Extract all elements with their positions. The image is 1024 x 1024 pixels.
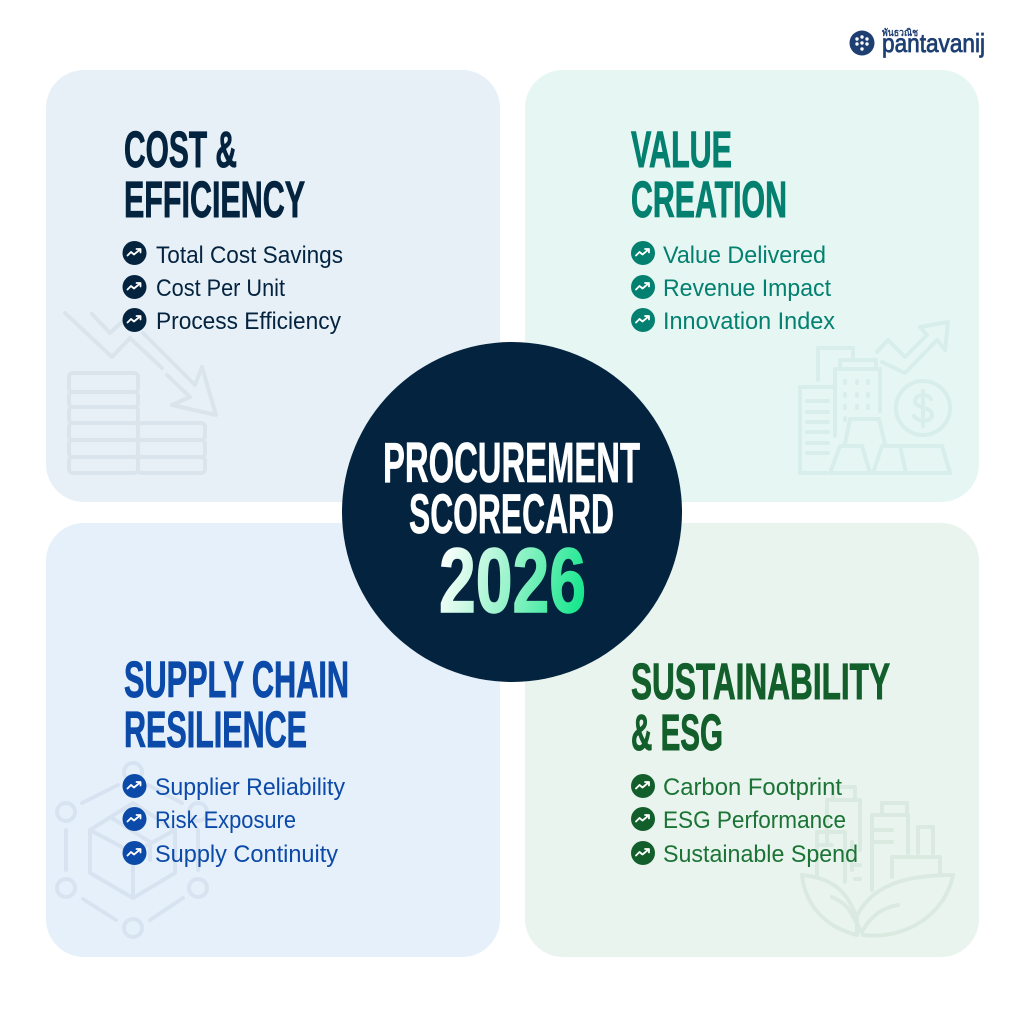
panel: supply chain resilience xyxy=(46,523,500,957)
list: supply metrics: Risk Exposure xyxy=(155,807,296,834)
heading: cost and efficiency: COST & xyxy=(124,121,237,178)
icon: buildings, gold bars and rising arrow xyxy=(800,322,950,473)
list: value metrics: Value Delivered xyxy=(663,242,826,269)
heading: sustainability and ESG xyxy=(631,653,890,761)
logo: pantavanij xyxy=(850,27,985,58)
list: cost metrics: Cost Per Unit xyxy=(156,275,285,302)
heading: sustainability and ESG: & ESG xyxy=(631,704,723,761)
list: supply metrics xyxy=(122,774,345,868)
icon: box in network xyxy=(57,763,207,937)
center circle: procurement scorecard 2026: 2026 xyxy=(439,530,586,632)
icon: falling arrow over stacked coins xyxy=(65,313,216,473)
heading: cost and efficiency: EFFICIENCY xyxy=(124,171,305,228)
list: cost metrics: Process Efficiency xyxy=(156,308,341,335)
list: cost metrics xyxy=(122,241,343,335)
logo: pantavanij: พันธวณิช xyxy=(882,27,918,39)
panel: sustainability and ESG xyxy=(525,523,979,957)
logo: pantavanij: pantavanij xyxy=(882,28,985,58)
heading: value creation xyxy=(631,121,787,228)
heading: value creation: VALUE xyxy=(631,121,732,178)
center circle: procurement scorecard 2026: SCORECARD xyxy=(409,482,614,545)
heading: value creation: CREATION xyxy=(631,171,787,228)
list: sustainability metrics: ESG Performance xyxy=(663,807,846,834)
list: cost metrics: Total Cost Savings xyxy=(156,242,343,269)
list: sustainability metrics xyxy=(631,774,858,868)
panel: value creation xyxy=(525,70,979,502)
list: supply metrics: Supplier Reliability xyxy=(155,774,345,801)
panel: cost and efficiency xyxy=(46,70,500,502)
heading: supply chain resilience: SUPPLY CHAIN xyxy=(124,651,349,708)
center circle: procurement scorecard 2026: PROCUREMENT xyxy=(383,431,640,495)
heading: cost and efficiency xyxy=(124,121,305,228)
list: value metrics: Revenue Impact xyxy=(663,275,831,302)
list: sustainability metrics: Carbon Footprint xyxy=(663,774,842,801)
list: value metrics xyxy=(631,241,835,335)
list: value metrics: Innovation Index xyxy=(663,308,835,335)
icon: city on leaves xyxy=(802,787,953,936)
center circle: procurement scorecard 2026 xyxy=(342,342,682,682)
heading: supply chain resilience: RESILIENCE xyxy=(124,701,307,758)
list: sustainability metrics: Sustainable Spend xyxy=(663,841,858,868)
heading: supply chain resilience xyxy=(124,651,349,758)
list: supply metrics: Supply Continuity xyxy=(155,841,338,868)
